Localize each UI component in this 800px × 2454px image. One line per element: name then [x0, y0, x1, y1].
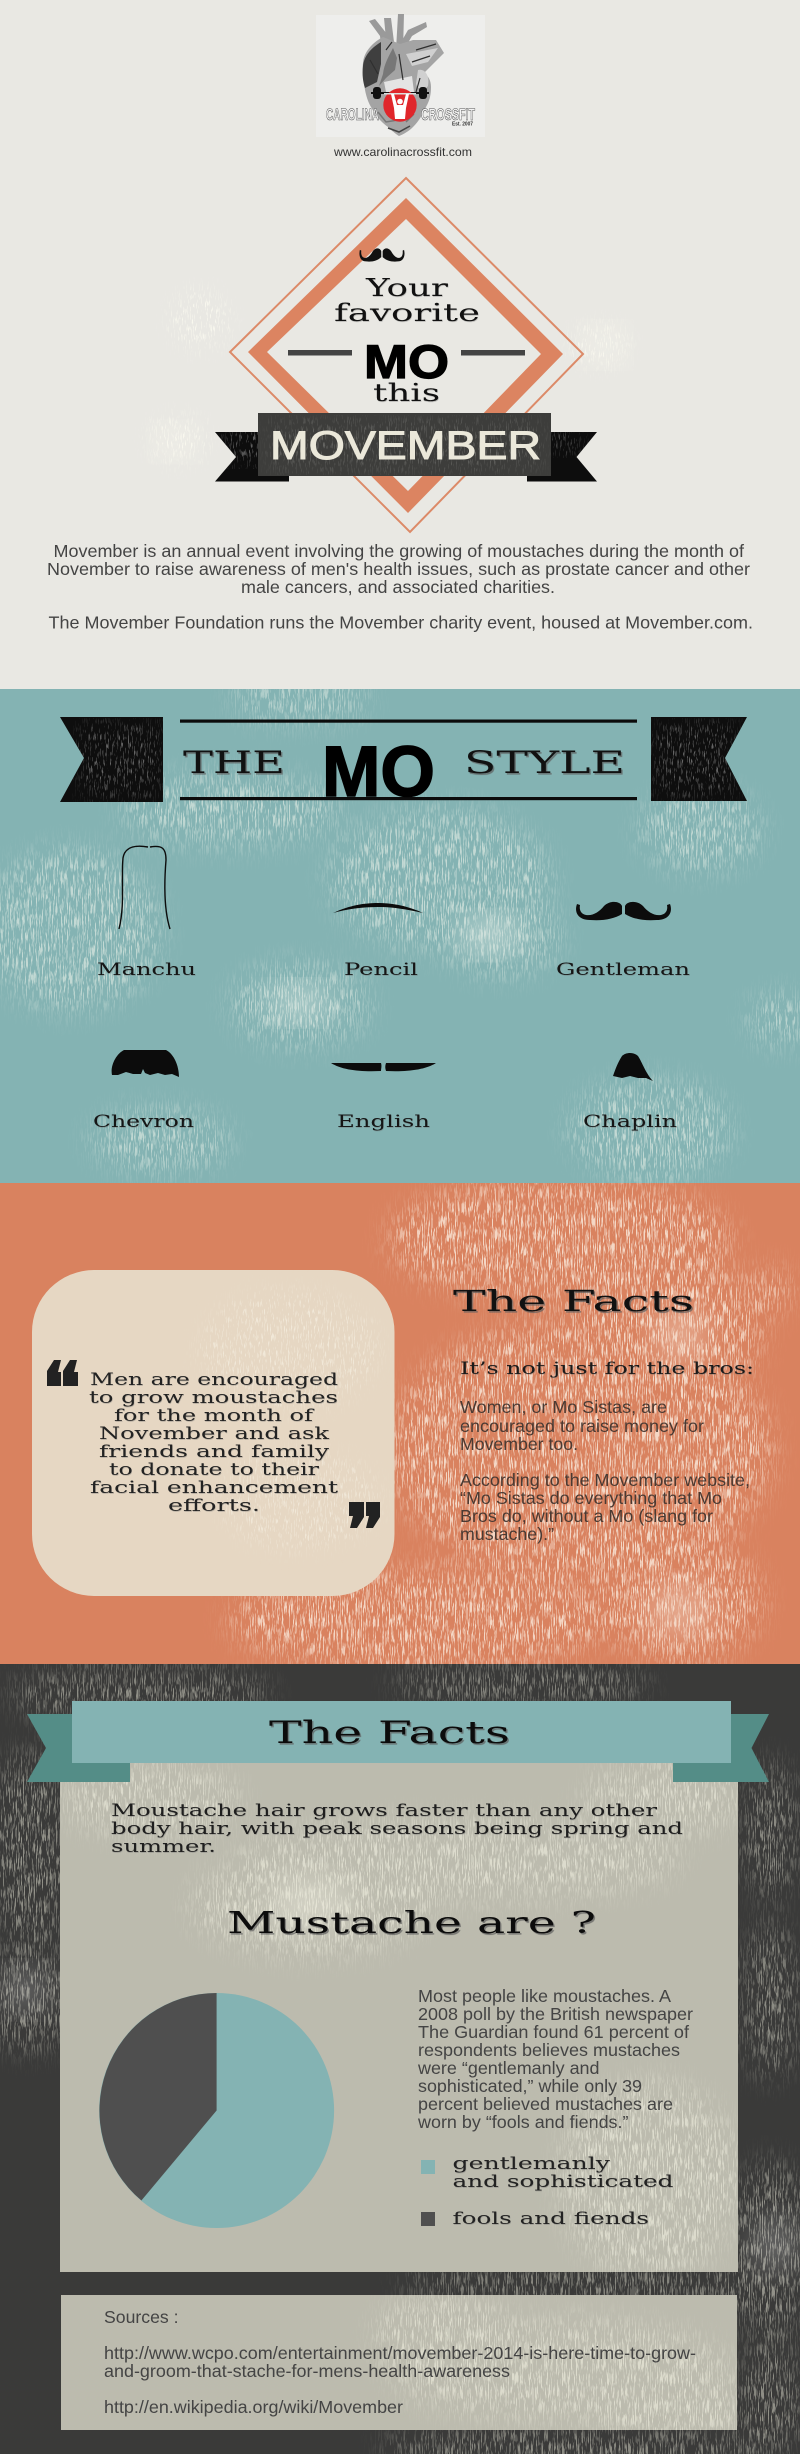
item: manchu: Manchu	[97, 960, 196, 980]
subheading: It’s not just for the bros:	[460, 1359, 754, 1378]
shaded left chamber	[363, 42, 381, 88]
ribbon right	[651, 717, 747, 801]
facts text: According to the Movember website,	[460, 1470, 750, 1490]
quote text: November and ask	[99, 1424, 330, 1443]
quote text: to donate to their	[109, 1460, 319, 1479]
facts text: Movember too.	[460, 1434, 578, 1454]
icon: closing quote	[349, 1502, 380, 1528]
facts text: mustache).”	[460, 1524, 554, 1544]
item: manchu	[97, 846, 196, 980]
website url: www.carolinacrossfit.com	[333, 145, 472, 159]
icon: opening quote	[47, 1360, 78, 1386]
heading: the facts: The Facts	[453, 1284, 694, 1318]
heading: your favorite: favorite	[334, 299, 480, 327]
body text	[111, 1801, 684, 1856]
heading: mustache are: Mustache are ?	[227, 1906, 596, 1941]
barbell	[371, 92, 429, 94]
legend: gentlemanly	[421, 2154, 674, 2192]
red badge	[383, 88, 417, 122]
ribbon: MOVEMBER	[215, 413, 597, 482]
diamond badge	[230, 178, 583, 532]
legend: fools and fiends	[421, 2209, 649, 2229]
facts text	[460, 1397, 750, 1544]
body text: Moustache hair grows faster than any other	[111, 1801, 657, 1820]
item: english: English	[337, 1112, 430, 1132]
item: chaplin: Chaplin	[583, 1112, 677, 1132]
quote text: for the month of	[114, 1406, 316, 1425]
item: pencil	[333, 903, 423, 980]
heading: this: this	[373, 379, 440, 407]
logo: Carolina CrossFit heart: Est. 2007	[452, 122, 473, 128]
ribbon left	[60, 717, 163, 802]
sources panel: http://en.wikipedia.org/wiki/Movember	[104, 2397, 403, 2417]
item: english	[331, 1063, 436, 1132]
pie chart	[99, 1993, 334, 2228]
item: gentleman	[556, 902, 690, 980]
panel: dark facts section	[0, 1664, 800, 2454]
facts text: Bros do, without a Mo (slang for	[460, 1506, 713, 1526]
item: chaplin	[583, 1053, 677, 1132]
heading text: THE	[183, 745, 285, 781]
panel: intro header section	[48, 14, 752, 632]
sources panel: and-groom-that-stache-for-mens-health-awareness	[104, 2361, 510, 2381]
sources panel: http://www.wcpo.com/entertainment/movember-2014-is-here-time-to-grow-	[104, 2343, 696, 2363]
facts text: Women, or Mo Sistas, are	[460, 1397, 667, 1417]
intro text: The Movember Foundation runs the Movember charity event, housed at Movember.com.	[48, 612, 753, 632]
intro text: Movember is an annual event involving the growing of moustaches during the month of	[54, 541, 744, 561]
intro text	[47, 541, 753, 632]
quote text: to grow moustaches	[89, 1388, 338, 1407]
heading: your favorite: Your	[365, 274, 449, 302]
intro text: November to raise awareness of men's health issues, such as prostate cancer and other	[47, 559, 750, 579]
facts text: encouraged to raise money for	[460, 1416, 704, 1436]
poll text: worn by “fools and fiends.”	[417, 2112, 629, 2132]
heading: your favorite	[334, 274, 480, 327]
vessels	[369, 14, 427, 52]
item: gentleman: Gentleman	[556, 960, 690, 980]
legend: gentlemanly: and sophisticated	[452, 2172, 674, 2192]
quote text: efforts.	[168, 1496, 260, 1515]
quote card	[32, 1270, 394, 1596]
poll text: sophisticated,” while only 39	[418, 2076, 642, 2096]
legend: gentlemanly: gentlemanly	[452, 2154, 611, 2174]
banner: the facts	[27, 1701, 769, 1782]
item: chevron	[93, 1050, 194, 1132]
poll text	[417, 1986, 693, 2132]
ribbon: MOVEMBER: MOVEMBER	[270, 424, 541, 468]
facts card	[60, 1760, 743, 2280]
sources panel	[61, 2295, 737, 2430]
item: chevron: Chevron	[93, 1112, 194, 1132]
banner: the mo style	[60, 717, 747, 802]
logo: Carolina CrossFit heart: CAROLINA	[326, 105, 379, 124]
legend: fools and fiends: fools and fiends	[452, 2209, 649, 2229]
heading: MO: MO	[364, 335, 449, 388]
heading text: STYLE	[464, 745, 625, 781]
poll text: Most people like moustaches. A	[418, 1986, 671, 2006]
poll text: respondents believes mustaches	[418, 2040, 680, 2060]
poll text: percent believed mustaches are	[418, 2094, 673, 2114]
poll text: 2008 poll by the British newspaper	[418, 2004, 693, 2024]
facts text: “Mo Sistas do everything that Mo	[460, 1488, 722, 1508]
body text: body hair, with peak seasons being spring and	[111, 1819, 684, 1838]
body text: summer.	[111, 1837, 216, 1856]
divider bars	[288, 350, 525, 356]
logo: Carolina CrossFit heart: CROSSFIT	[421, 105, 475, 124]
panel: the mo style	[0, 680, 800, 1183]
intro text: male cancers, and associated charities.	[241, 577, 555, 597]
poll text: were “gentlemanly and	[417, 2058, 600, 2078]
quote text: facial enhancement	[90, 1478, 339, 1497]
item: pencil: Pencil	[344, 960, 418, 980]
poll text: The Guardian found 61 percent of	[418, 2022, 689, 2042]
heading text	[183, 745, 625, 781]
panel: facts orange	[0, 1180, 800, 1670]
sources panel: Sources :	[104, 2307, 178, 2327]
quote text	[89, 1370, 339, 1515]
banner: the facts: The Facts	[269, 1715, 510, 1751]
logo: Carolina CrossFit heart	[316, 14, 485, 137]
icon: mustache	[359, 248, 405, 262]
quote text: friends and family	[99, 1442, 330, 1461]
banner: the mo style: MO	[322, 733, 435, 812]
quote text: Men are encouraged	[90, 1370, 339, 1389]
